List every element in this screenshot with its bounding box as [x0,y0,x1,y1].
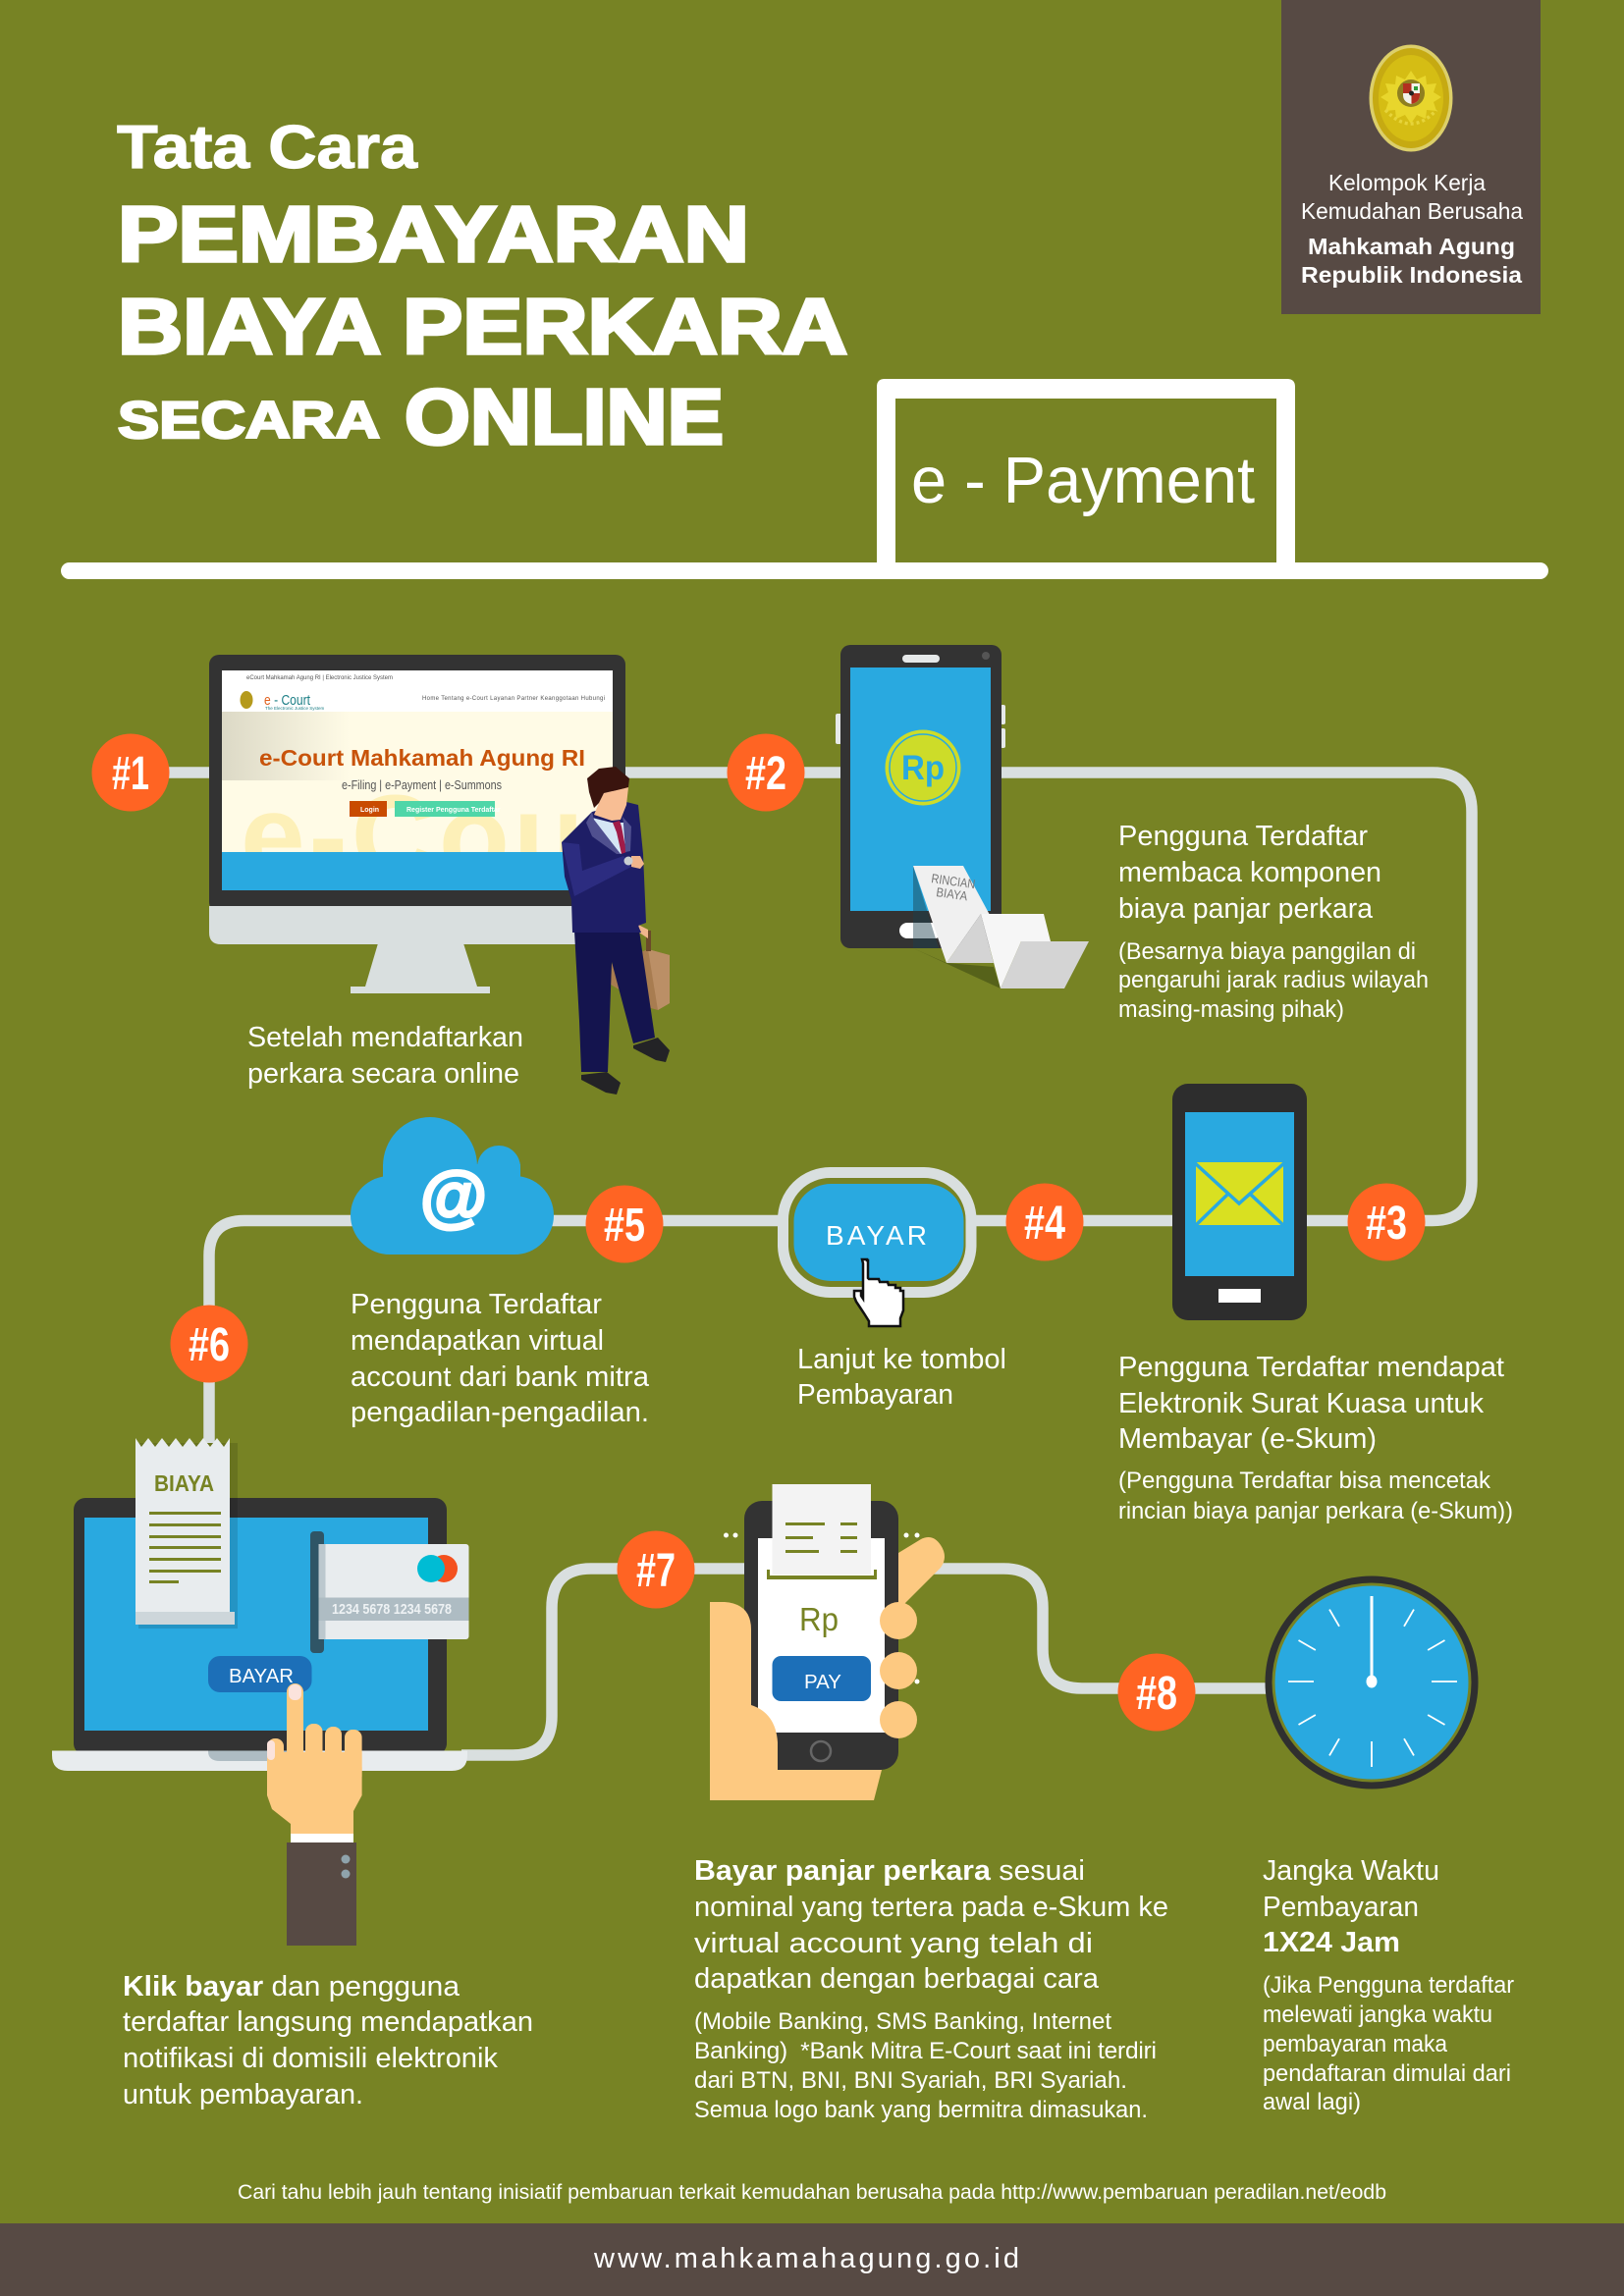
step 7: hand holding phone: PAY [804,1672,841,1693]
step 4: BAYAR button [784,1172,971,1326]
text: step 2: (Besarnya biaya panggilan di [1118,938,1416,965]
text: step 2: pengaruhi jarak radius wilayah [1118,967,1429,993]
BAYAR button on laptop: BAYAR [229,1666,294,1687]
step 5: cloud with at sign: @ [420,1157,487,1234]
footer band: www.mahkamahagung.go.id [593,2243,1019,2274]
badge 8: #8 [1136,1668,1177,1720]
icon: Rp coin: Rp [901,749,945,787]
text: step 8: (Jika Pengguna terdaftar [1263,1972,1514,1999]
badge 8 [1117,1653,1196,1732]
icon: Rp coin [886,730,960,805]
icon: pointer hand [854,1259,903,1326]
monitor screen: e-Court Mahkamah Agung RI [259,745,585,771]
badge 4 [1005,1184,1084,1260]
receipt: BIAYA [154,1470,214,1496]
step 1: monitor [209,655,625,993]
text: step 7: dapatkan dengan berbagai cara [694,1963,1100,1995]
text: step 7: (Mobile Banking, SMS Banking, Internet [694,2008,1111,2035]
icon: Mahkamah Agung emblem [1369,45,1453,151]
panel: institution badge [1281,0,1541,314]
text: step 7: virtual account yang telah di [694,1928,1093,1959]
label: e-Payment: e - Payment [911,444,1255,517]
text: step 3: Pengguna Terdaftar mendapat [1118,1352,1504,1383]
badge 3 [1347,1184,1426,1260]
step 5: cloud with at sign [351,1117,554,1255]
text: step 2: biaya panjar perkara [1118,893,1374,925]
badge 1 [92,734,169,811]
badge 7: #7 [636,1545,676,1597]
text: step 1: perkara secara online [247,1058,519,1090]
monitor screen: Register Pengguna Terdaftar [406,807,501,814]
text: step 7: nominal yang tertera pada e-Skum ke [694,1892,1168,1923]
text: working group: Mahkamah Agung [1308,234,1515,259]
text: step 6: Klik bayar dan pengguna [123,1971,460,2002]
text: step 2: membaca komponen [1118,857,1381,888]
text: step 7: Semua logo bank yang bermitra dimasukan. [694,2097,1148,2123]
monitor screen: Home Tentang e-Court Layanan Partner Keanggotaan Hubungi [422,696,605,702]
monitor screen: Login [360,807,379,814]
text: step 1 [247,1022,523,1090]
icon: folded receipt: BIAYA [936,884,969,903]
monitor screen: e-Cou [241,772,584,901]
text: step 2: masing-masing pihak) [1118,996,1344,1023]
hand pointing [267,1683,362,1946]
badge 7 [617,1531,695,1608]
title: BIAYA PERKARA [118,283,847,370]
text: step 3: rincian biaya panjar perkara (e-Skum)) [1118,1498,1513,1524]
text: step 8: Pembayaran [1263,1892,1419,1923]
icon: envelope [1194,1162,1285,1227]
text: step 8: 1X24 Jam [1263,1927,1400,1958]
text: step 4: Pembayaran [797,1379,953,1411]
badge 6 [171,1306,247,1382]
badge 4: #4 [1024,1198,1065,1250]
text: step 8: Jangka Waktu [1263,1855,1439,1887]
text: step 8 [1263,1855,1514,2115]
step 7: hand holding phone: Rp [799,1601,839,1637]
illustration: businessman [562,767,670,1095]
icon: folded receipt: RINCIAN [931,871,976,891]
text: step 6: untuk pembayaran. [123,2079,363,2110]
title: SECARA [118,392,380,450]
footer note: Cari tahu lebih jauh tentang inisiatif pembaruan terkait kemudahan berusaha pada http://www.pembaruan peradilan.net/eodb [238,2181,1386,2204]
icon: folded receipt [913,866,1089,988]
title: ONLINE [405,373,724,460]
text: step 2: Pengguna Terdaftar [1118,821,1368,852]
text: step 6 [123,1971,533,2110]
step 7: hand holding phone [710,1484,945,1800]
text: step 3: (Pengguna Terdaftar bisa mencetak [1118,1468,1491,1494]
monitor screen: e - Court [264,692,311,709]
text: step 7: Banking) *Bank Mitra E-Court saat ini terdiri [694,2038,1157,2064]
monitor screen: The Electronic Justice System [265,706,325,711]
text: step 4: Lanjut ke tombol [797,1344,1006,1375]
text: step 5: mendapatkan virtual [351,1325,604,1357]
text: working group [1301,170,1523,288]
badge 2 [727,734,805,811]
connector lines [131,773,1472,1755]
badge 6: #6 [189,1319,230,1371]
text: step 6: notifikasi di domisili elektronik [123,2043,498,2074]
title [117,114,847,460]
text: step 8: pendaftaran dimulai dari [1263,2060,1511,2087]
text: step 5: pengadilan-pengadilan. [351,1397,649,1428]
text: step 5 [351,1289,650,1428]
briefcase [611,931,670,1010]
receipt [135,1438,238,1629]
credit card: 1234 5678 1234 5678 [332,1601,452,1618]
step 4: BAYAR button: BAYAR [826,1220,927,1251]
text: step 7: dari BTN, BNI, BNI Syariah, BRI Syariah. [694,2067,1127,2094]
laptop [52,1498,467,1771]
footer band [0,2223,1624,2296]
step 6: laptop with receipt, card and hand [52,1438,469,1946]
badge 3: #3 [1366,1198,1407,1250]
text: step 8: melewati jangka waktu [1263,2002,1492,2028]
text: step 3: Membayar (e-Skum) [1118,1423,1377,1455]
text: step 7: Bayar panjar perkara sesuai [694,1855,1085,1887]
title: Tata Cara [117,114,418,182]
step badges [92,734,1426,1732]
text: step 4 [797,1344,1006,1411]
text: step 6: terdaftar langsung mendapatkan [123,2006,533,2038]
text: step 5: Pengguna Terdaftar [351,1289,602,1320]
text: step 5: account dari bank mitra [351,1362,650,1393]
text: step 1: Setelah mendaftarkan [247,1022,523,1053]
monitor screen: e-Filing | e-Payment | e-Summons [342,777,502,792]
text: working group: Kemudahan Berusaha [1301,198,1523,224]
text: step 2 [1118,821,1429,1023]
text: step 8: pembayaran maka [1263,2031,1447,2057]
step 8: clock [1269,1579,1475,1786]
text: working group: Kelompok Kerja [1328,170,1486,195]
monitor screen [222,670,613,901]
badge 5 [585,1186,664,1262]
title: PEMBAYARAN [118,190,749,278]
text: step 3: Elektronik Surat Kuasa untuk [1118,1388,1484,1419]
badge 1: #1 [112,748,149,800]
text: working group: Republik Indonesia [1301,262,1522,288]
text: step 8: awal lagi) [1263,2089,1361,2115]
text: step 7 [694,1855,1168,2123]
credit card [310,1531,469,1653]
text: step 3 [1118,1352,1513,1524]
BAYAR button on laptop [208,1656,312,1692]
badge 2: #2 [745,748,786,800]
e-Payment tab and divider [61,379,1548,579]
step 2: phone with Rp coin [836,645,1089,988]
badge 5: #5 [604,1200,645,1252]
step 3: phone with envelope [1172,1084,1307,1320]
monitor screen: eCourt Mahkamah Agung RI | Electronic Justice System [246,675,393,681]
